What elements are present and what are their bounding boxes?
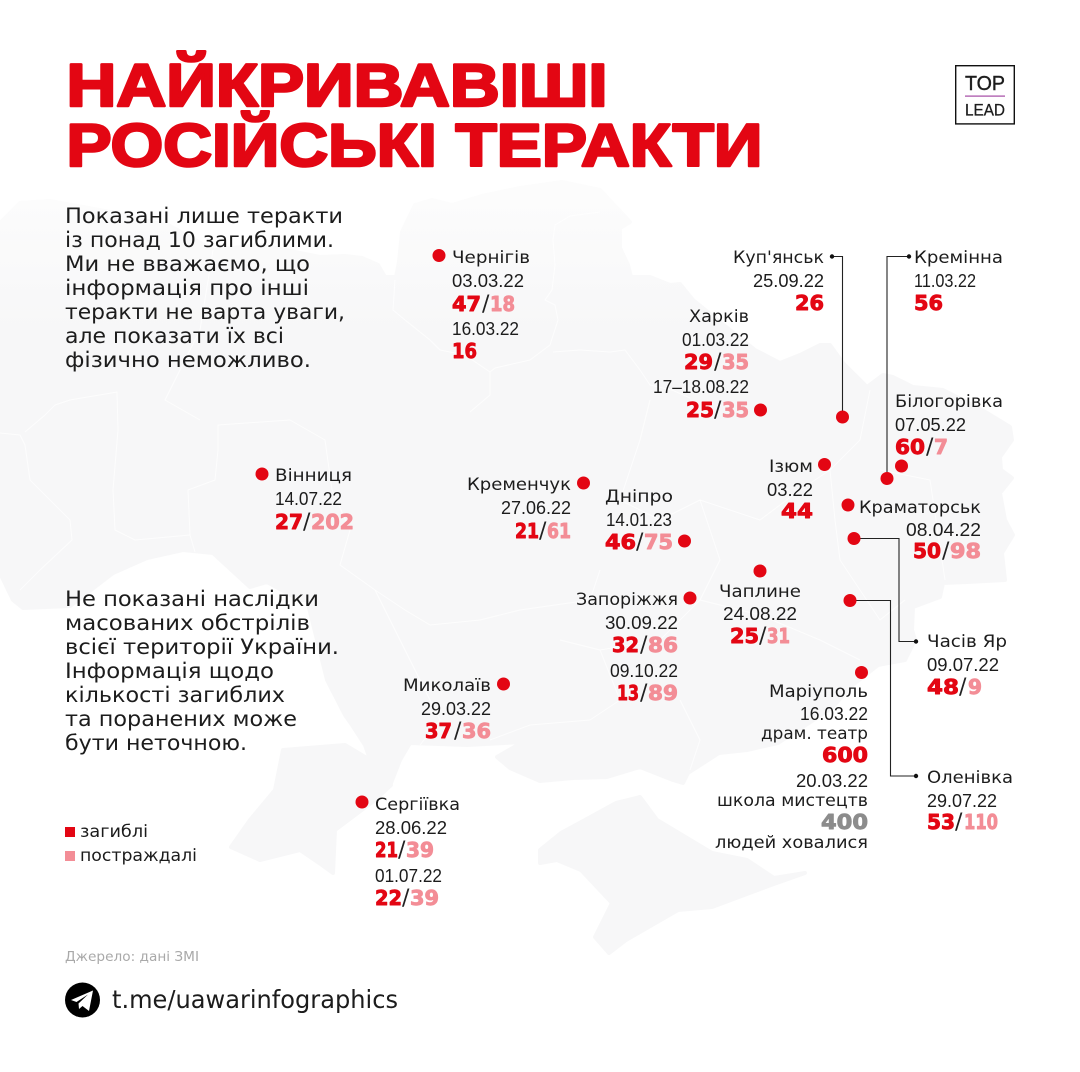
- city: Оленівка with leader line: 53: [927, 810, 955, 834]
- city: Кремінна with leader line: [880, 247, 1003, 485]
- city: Сергіївка: 28.06.22: [375, 818, 447, 838]
- city: Харків: /: [714, 398, 722, 423]
- city: Кременчук: 21: [515, 519, 539, 543]
- text block: scope note: теракти не варта уваги,: [65, 300, 345, 325]
- city: Куп'янськ with leader line: [733, 247, 849, 424]
- city: Дніпро: /: [636, 530, 644, 555]
- city: Миколаїв: 37: [425, 719, 452, 743]
- text block: limitations note: масованих обстрілів: [65, 611, 310, 636]
- city: Запоріжжя: 13: [617, 681, 639, 705]
- city: Кременчук: 27.06.22: [501, 498, 571, 518]
- city: Часів Яр with leader line: 48: [927, 675, 959, 699]
- city: Чернігів: 03.03.22: [452, 271, 524, 291]
- title: НАЙКРИВАВІШІ: [66, 52, 608, 119]
- city: Часів Яр with leader line: 9: [968, 675, 982, 699]
- telegram link: t.me/uawarinfographics: [112, 985, 398, 1014]
- text block: scope note: інформація про інші: [65, 276, 309, 301]
- city: Харків: 35: [722, 398, 749, 422]
- city: Краматорськ: 98: [950, 539, 981, 563]
- legend: загиблі: [80, 821, 148, 841]
- text block: limitations note: Не показані наслідки: [65, 587, 319, 612]
- text block: limitations note: бути неточною.: [65, 731, 247, 756]
- city: Чернігів: 16.03.22: [452, 319, 519, 339]
- city: Білогорівка: [895, 391, 1003, 472]
- city: Харків: [653, 306, 767, 423]
- city: Білогорівка: 7: [934, 435, 948, 459]
- city: Дніпро: 46: [605, 530, 636, 554]
- city: Миколаїв: Миколаїв: [403, 675, 491, 695]
- city: Чернігів: Чернігів: [452, 247, 530, 267]
- city: Часів Яр with leader line: 09.07.22: [927, 655, 999, 675]
- text block: scope note: із понад 10 загиблими.: [65, 228, 334, 253]
- city: Харків: 01.03.22: [682, 330, 749, 350]
- city: Миколаїв: /: [454, 719, 462, 744]
- city: Сергіївка: 22: [375, 886, 402, 910]
- city: Сергіївка: /: [402, 886, 410, 911]
- city: Сергіївка: 01.07.22: [375, 866, 442, 886]
- title: [66, 52, 762, 179]
- legend: [65, 821, 197, 865]
- city: Маріуполь: Маріуполь: [769, 681, 868, 701]
- city: Сергіївка: 39: [410, 886, 439, 910]
- city: Сергіївка: [356, 794, 460, 911]
- city: Вінниця: /: [303, 510, 311, 535]
- text block: scope note: але показати їх всі: [65, 324, 284, 349]
- city: Ізюм: [767, 456, 831, 523]
- city: Запоріжжя: 32: [612, 633, 639, 657]
- city: Харків: 29: [684, 350, 713, 374]
- city: Харків: /: [714, 350, 722, 375]
- city: Сергіївка: /: [398, 838, 406, 863]
- city: Оленівка with leader line: [844, 594, 1013, 835]
- city: Сергіївка: 21: [375, 838, 398, 862]
- city: Харків: Харків: [689, 306, 749, 326]
- city: Сергіївка: 39: [406, 838, 434, 862]
- city: Дніпро: [605, 486, 691, 555]
- city: Оленівка with leader line: Оленівка: [927, 767, 1013, 787]
- city: Маріуполь: 600: [822, 743, 868, 767]
- source note: Джерело: дані ЗМІ: [65, 949, 199, 965]
- city: Часів Яр with leader line: [848, 532, 1007, 700]
- logo: Top Lead: TOP: [965, 73, 1005, 95]
- city: Чаплине: Чаплине: [719, 581, 801, 601]
- city: Миколаїв: [403, 675, 510, 744]
- city: Кремінна with leader line: Кремінна: [914, 247, 1003, 267]
- city: Чаплине: [719, 564, 801, 649]
- city: Вінниця: 14.07.22: [275, 489, 342, 509]
- city: Ізюм: 03.22: [767, 480, 813, 500]
- city: Маріуполь: людей ховалися: [715, 832, 868, 852]
- city: Запоріжжя: Запоріжжя: [576, 589, 678, 609]
- city: Чернігів: 18: [490, 292, 515, 316]
- city: Білогорівка: 07.05.22: [895, 415, 966, 435]
- city: Дніпро: 75: [644, 530, 673, 554]
- city: Миколаїв: 36: [462, 719, 491, 743]
- title: РОСІЙСЬКІ ТЕРАКТИ: [66, 112, 762, 179]
- city: Часів Яр with leader line: /: [959, 675, 967, 700]
- city: Чаплине: 31: [767, 624, 790, 648]
- city: Запоріжжя: 89: [648, 681, 678, 705]
- city: Маріуполь: школа мистецтв: [717, 790, 868, 810]
- city: Кременчук: [467, 474, 590, 544]
- text block: limitations note: Інформація щодо: [65, 659, 274, 684]
- city: Оленівка with leader line: 110: [964, 810, 998, 834]
- city: Чаплине: 25: [730, 624, 759, 648]
- city: Ізюм: Ізюм: [769, 456, 813, 476]
- city: Миколаїв: 29.03.22: [421, 699, 491, 719]
- city: Оленівка with leader line: 29.07.22: [927, 791, 997, 811]
- city: Ізюм: 44: [781, 499, 813, 523]
- city: Чернігів: 16: [452, 339, 477, 363]
- logo: Top Lead: [956, 66, 1014, 124]
- city: Маріуполь: [715, 666, 868, 852]
- city: Запоріжжя: /: [640, 633, 648, 658]
- city: Харків: 17–18.08.22: [653, 377, 749, 397]
- city: Запоріжжя: [576, 589, 696, 706]
- city: Запоріжжя: 86: [648, 633, 678, 657]
- city: Кременчук: /: [539, 519, 547, 544]
- city: Краматорськ: 08.04.22: [906, 520, 981, 540]
- city: Білогорівка: Білогорівка: [895, 391, 1003, 411]
- city: Запоріжжя: /: [640, 681, 648, 706]
- text block: scope note: [65, 204, 345, 373]
- text block: scope note: фізично неможливо.: [65, 348, 311, 373]
- city: Куп'янськ with leader line: 25.09.22: [753, 271, 824, 291]
- city: Запоріжжя: 30.09.22: [605, 613, 678, 633]
- city: Білогорівка: 60: [895, 435, 925, 459]
- city: Маріуполь: 16.03.22: [800, 704, 868, 724]
- city: Маріуполь: 400: [821, 810, 868, 834]
- city: Чаплине: 24.08.22: [723, 604, 797, 624]
- city: Чернігів: [432, 247, 530, 363]
- city: Вінниця: [256, 465, 354, 535]
- city: Краматорськ: Краматорськ: [859, 497, 981, 517]
- city: Чернігів: /: [482, 292, 490, 317]
- city: Вінниця: 202: [311, 510, 354, 534]
- city: Краматорськ: [842, 497, 981, 564]
- city: Краматорськ: 50: [913, 539, 941, 563]
- text block: limitations note: [65, 587, 339, 756]
- city: Куп'янськ with leader line: 26: [795, 291, 824, 315]
- city: Краматорськ: /: [942, 539, 950, 564]
- legend: постраждалі: [80, 845, 197, 865]
- city: Вінниця: Вінниця: [275, 465, 352, 485]
- background map of Ukraine: [0, 182, 1013, 953]
- city: Кремінна with leader line: 11.03.22: [914, 271, 976, 291]
- city: Запоріжжя: 09.10.22: [610, 661, 678, 681]
- text block: scope note: Показані лише теракти: [65, 204, 343, 229]
- text block: limitations note: всієї території України.: [65, 635, 339, 660]
- city: Кременчук: Кременчук: [467, 474, 571, 494]
- city: Кременчук: 61: [547, 519, 571, 543]
- city: Харків: 35: [722, 350, 749, 374]
- city: Дніпро: 14.01.23: [606, 510, 672, 530]
- city: Куп'янськ with leader line: Куп'янськ: [733, 247, 824, 267]
- city: Дніпро: Дніпро: [605, 486, 673, 506]
- text block: scope note: Ми не вважаємо, що: [65, 252, 310, 277]
- city: Чернігів: 47: [452, 292, 481, 316]
- text block: limitations note: та поранених може: [65, 707, 297, 732]
- city: Маріуполь: драм. театр: [761, 723, 868, 743]
- city: Харків: 25: [686, 398, 714, 422]
- city: Оленівка with leader line: /: [955, 810, 963, 835]
- logo: Top Lead: LEAD: [965, 100, 1005, 120]
- city: Чаплине: /: [759, 624, 767, 649]
- city: Білогорівка: /: [926, 435, 934, 460]
- text block: limitations note: кількості загиблих: [65, 683, 285, 708]
- city: Сергіївка: Сергіївка: [375, 794, 460, 814]
- city: Кремінна with leader line: 56: [914, 291, 943, 315]
- city: Часів Яр with leader line: Часів Яр: [927, 631, 1007, 651]
- city: Маріуполь: 20.03.22: [796, 771, 868, 791]
- city: Вінниця: 27: [275, 510, 303, 534]
